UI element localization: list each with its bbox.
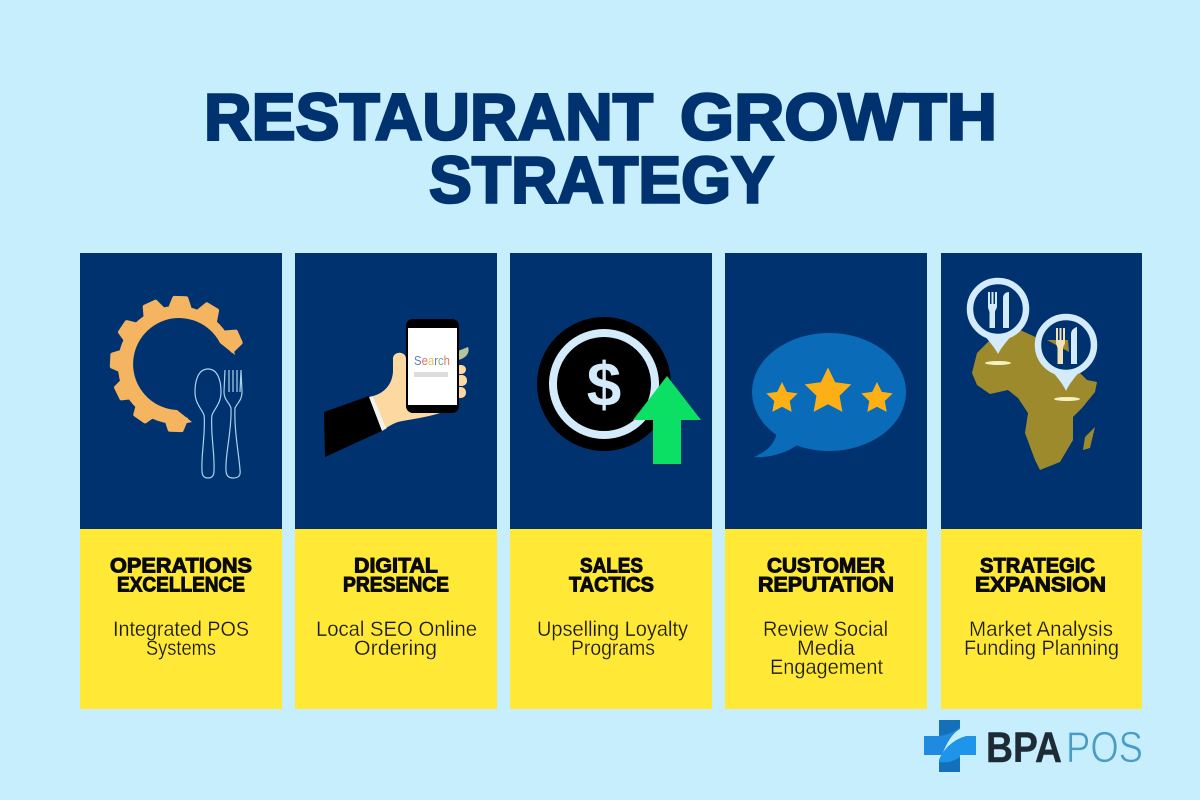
icon: gear with spoon and fork — [112, 298, 242, 478]
text block: Ordering — [354, 637, 437, 660]
icon: dollar coin with up arrow — [537, 317, 701, 464]
heading — [569, 554, 654, 596]
text block: Programs — [571, 637, 655, 660]
icon: medical cross — [924, 720, 976, 772]
title — [204, 80, 997, 216]
text block — [964, 618, 1119, 660]
title: STRATEGY — [429, 142, 774, 216]
heading: TACTICS — [569, 574, 654, 596]
text block: Media — [797, 637, 855, 660]
panel: customer reputation — [725, 253, 927, 709]
heading: STRATEGIC — [980, 554, 1095, 578]
text block: Systems — [146, 637, 216, 660]
heading: SALES — [580, 554, 643, 578]
text block: Funding Planning — [964, 637, 1119, 660]
heading — [758, 554, 894, 596]
text block — [113, 618, 249, 660]
panel: sales tactics — [510, 253, 712, 709]
heading: OPERATIONS — [110, 554, 252, 578]
heading: CUSTOMER — [767, 554, 885, 578]
title: GROWTH — [680, 80, 997, 154]
text block — [763, 618, 888, 679]
heading — [975, 554, 1106, 596]
heading: PRESENCE — [343, 574, 449, 596]
text block: Upselling Loyalty — [537, 618, 688, 641]
text block — [316, 618, 477, 660]
icon: africa map with pins — [970, 281, 1097, 470]
heading: DIGITAL — [354, 554, 438, 578]
text block: Engagement — [770, 656, 883, 679]
text block: Local SEO Online — [316, 618, 477, 641]
heading — [110, 554, 252, 596]
text block: Integrated POS — [113, 618, 249, 641]
logo: BPA POS: POS — [1066, 723, 1143, 772]
logo: BPA POS: BPA — [986, 724, 1062, 772]
panel: operations excellence — [80, 253, 282, 709]
title: RESTAURANT — [204, 80, 653, 154]
text block: Review Social — [763, 618, 888, 641]
heading: EXPANSION — [975, 574, 1106, 596]
icon: speech bubble with stars — [752, 333, 906, 457]
icon: dollar coin with up arrow: $ — [587, 351, 621, 420]
heading — [343, 554, 449, 596]
panel: strategic expansion — [941, 253, 1142, 709]
text block — [537, 618, 688, 660]
heading: REPUTATION — [758, 574, 894, 596]
panel: digital presence — [295, 253, 497, 709]
icon: hand holding phone — [324, 319, 469, 457]
heading: EXCELLENCE — [117, 574, 245, 596]
logo: BPA POS — [924, 720, 1143, 772]
icon: hand holding phone: Search — [414, 353, 450, 368]
text block: Market Analysis — [969, 618, 1113, 641]
